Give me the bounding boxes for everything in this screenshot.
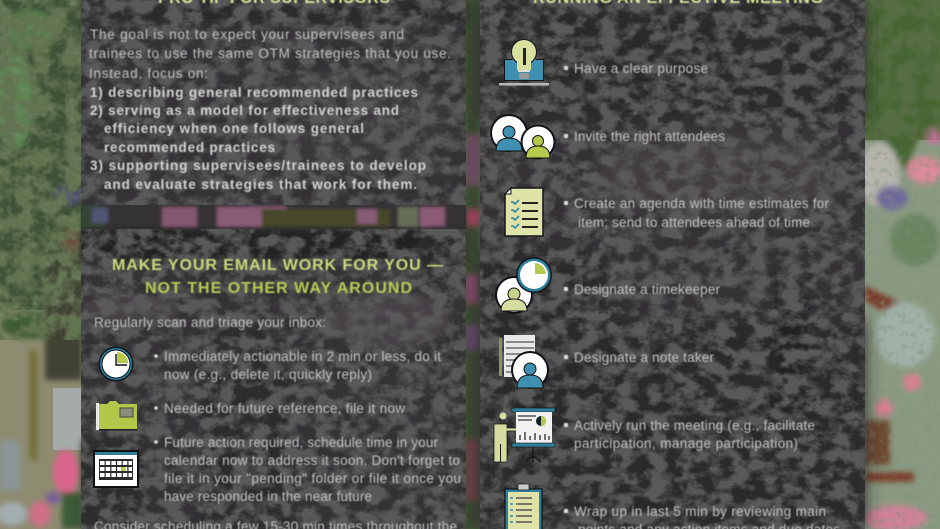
- text: triage item 2: Needed for future reference, file it now: [164, 401, 405, 416]
- text: timekeeper: Designate a timekeeper: [574, 282, 720, 297]
- text: wrap up: Wrap up in last 5 min by reviewing main: [574, 504, 826, 519]
- text: pro tip body: The goal is not to expect your supervisees and: [90, 27, 404, 42]
- text: pro tip body: 1) describing general recommended practices: [90, 85, 418, 100]
- photo: left foliage and stone wall: [0, 0, 82, 529]
- text: run the meeting: participation, manage participation): [574, 436, 798, 451]
- text: triage item 1: now (e.g., delete it, quickly reply): [164, 367, 372, 382]
- text: pro tip body: [89, 27, 451, 192]
- text: triage item 3: Future action required, schedule time in your: [164, 435, 438, 450]
- icon: note taker: [499, 335, 549, 389]
- icon: clipboard: [505, 484, 542, 529]
- text: clear purpose: Have a clear purpose: [574, 61, 708, 76]
- heading: email: NOT THE OTHER WAY AROUND: [145, 280, 412, 297]
- text: run the meeting: Actively run the meeting (e.g., facilitate: [574, 418, 815, 433]
- text: pro tip body: efficiency when one follows general: [104, 121, 364, 136]
- text: pro tip body: and evaluate strategies that work for them.: [104, 177, 417, 192]
- icon: agenda: [505, 188, 543, 236]
- text: triage item 1: Immediately actionable in 2 min or less, do it: [164, 349, 441, 364]
- text: pro tip body: 3) supporting supervisees/trainees to develop: [90, 158, 426, 173]
- flower band seen through panel: [81, 205, 466, 229]
- text: run the meeting: [564, 418, 815, 451]
- icon: lightbulb and book: [499, 39, 549, 86]
- text: note taker: Designate a note taker: [574, 350, 714, 365]
- icon: calendar: [93, 450, 139, 488]
- icon: two attendees: [490, 114, 556, 160]
- text: triage item 3: [154, 435, 461, 504]
- icon: clock: [98, 346, 134, 382]
- text: agenda: Create an agenda with time estimates for: [574, 196, 830, 211]
- text: pro tip body: 2) serving as a model for effectiveness and: [90, 103, 399, 118]
- text: pro tip body: recommended practices: [104, 140, 275, 155]
- text: triage item 3: have responded in the near future: [164, 489, 372, 504]
- heading: email: MAKE YOUR EMAIL WORK FOR YOU —: [112, 257, 443, 274]
- photo: right bush and flower border: [860, 0, 940, 529]
- text: triage item 3: file it in your "pending" folder or file it once you: [164, 471, 461, 486]
- text: wrap up: [564, 504, 840, 529]
- text: triage item 1: [154, 349, 441, 382]
- text: agenda: [564, 196, 830, 230]
- panel: running an effective meeting: [480, 0, 865, 529]
- icon: presenter: [494, 408, 555, 462]
- icon: folder: [96, 401, 137, 430]
- text: triage intro: Regularly scan and triage your inbox:: [94, 315, 326, 330]
- panel: pro tip and email: [80, 0, 466, 529]
- text: triage item 3: calendar now to address it soon. Don't forget to: [164, 453, 460, 468]
- text: attendees: Invite the right attendees: [574, 129, 725, 144]
- lighter and darker regions in panel: [80, 0, 466, 529]
- icon: timekeeper: [495, 257, 552, 314]
- text: pro tip body: trainees to use the same OTM strategies that you use.: [89, 46, 451, 61]
- text: agenda: item; send to attendees ahead of time: [578, 215, 810, 230]
- text: pro tip body: Instead, focus on:: [89, 66, 208, 81]
- photo: centre strip between panels: [466, 0, 480, 529]
- heading: email: [112, 257, 443, 297]
